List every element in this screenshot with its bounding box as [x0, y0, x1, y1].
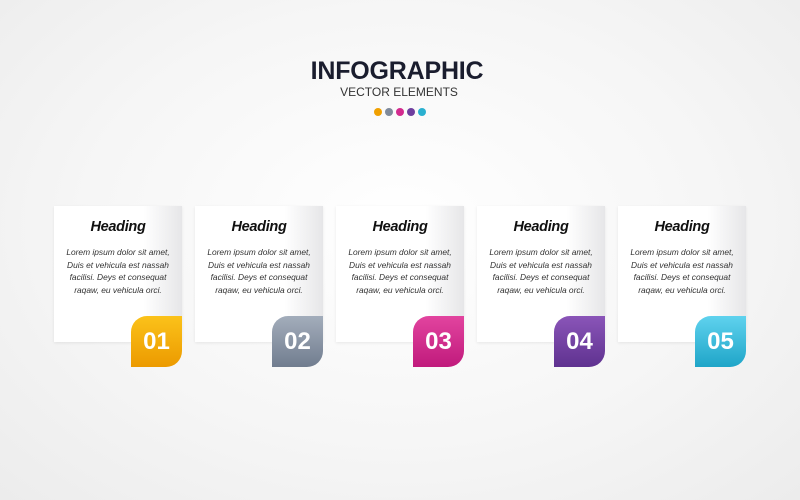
panel: step 05: Lorem ipsum dolor sit amet, Duis et vehicula est nassah facilisi. Deys et consequat raqaw, eu vehicula orci. [630, 247, 734, 295]
badge 04: 04 [566, 328, 593, 355]
badge 05: 05 [707, 328, 734, 355]
badge 03 [413, 316, 464, 367]
panel: step 05: Heading [654, 219, 710, 235]
panel: step 03: Lorem ipsum dolor sit amet, Duis et vehicula est nassah facilisi. Deys et consequat raqaw, eu vehicula orci. [348, 247, 452, 295]
badge 01 [131, 316, 182, 367]
panel: step 02 [196, 206, 323, 367]
panel: step 02: Heading [231, 219, 287, 235]
title: INFOGRAPHIC [311, 57, 483, 85]
panel: step 04 [478, 206, 605, 367]
badge 02 [272, 316, 323, 367]
badge 01: 01 [143, 328, 170, 355]
panel: step 01: Lorem ipsum dolor sit amet, Duis et vehicula est nassah facilisi. Deys et consequat raqaw, eu vehicula orci. [66, 247, 170, 295]
panel: step 03: Heading [372, 219, 428, 235]
color dots [374, 108, 426, 116]
badge 05 [695, 316, 746, 367]
panel: step 01: Heading [90, 219, 146, 235]
subtitle: VECTOR ELEMENTS [340, 85, 458, 99]
panel: step 01 [54, 206, 182, 367]
panel: step 02: Lorem ipsum dolor sit amet, Duis et vehicula est nassah facilisi. Deys et consequat raqaw, eu vehicula orci. [207, 247, 311, 295]
panel: step 04: Lorem ipsum dolor sit amet, Duis et vehicula est nassah facilisi. Deys et consequat raqaw, eu vehicula orci. [489, 247, 593, 295]
badge 02: 02 [284, 328, 311, 355]
panel: step 04: Heading [513, 219, 569, 235]
panel: step 05 [618, 206, 746, 367]
badge 03: 03 [425, 328, 452, 355]
panel: step 03 [336, 206, 464, 367]
badge 04 [554, 316, 605, 367]
